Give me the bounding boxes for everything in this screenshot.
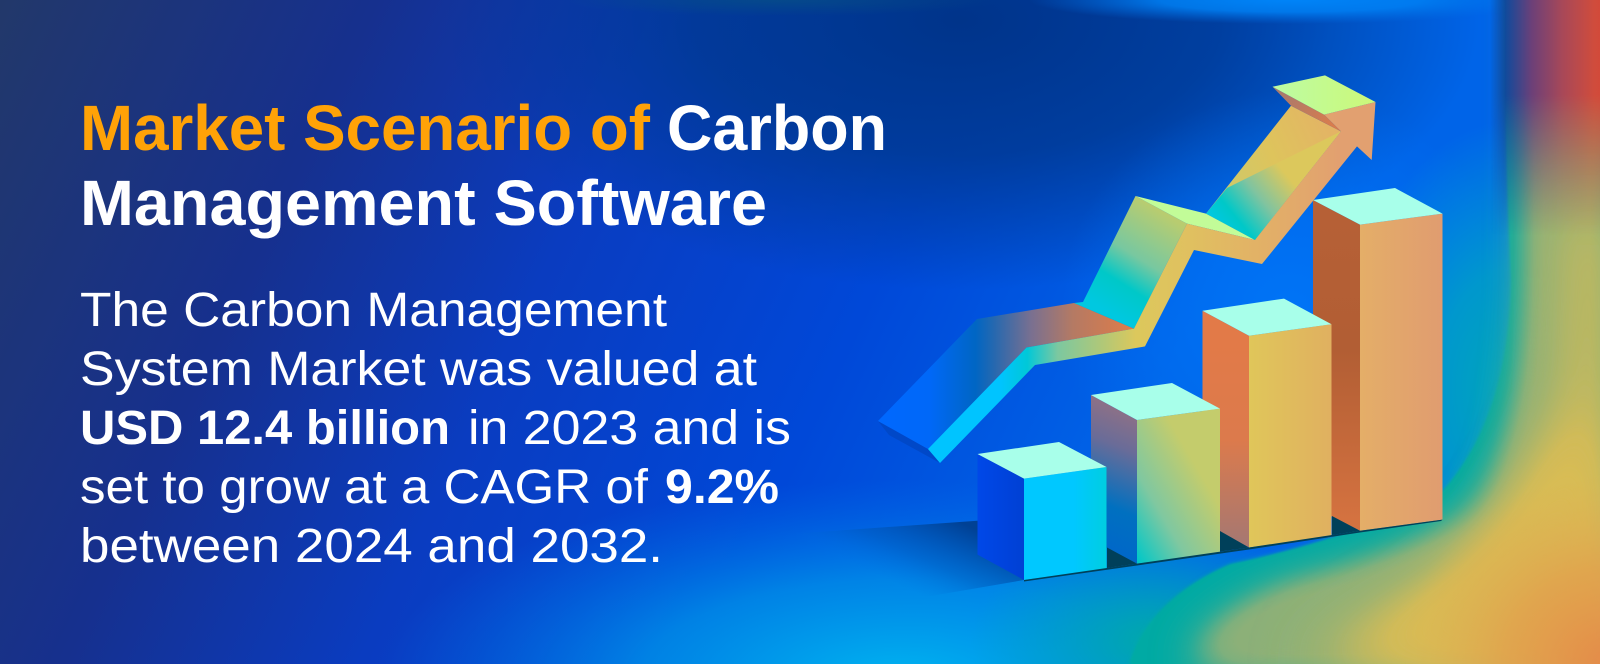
arrow head top face (1272, 75, 1376, 115)
floor shadow (790, 520, 1024, 597)
body text: The Carbon Management (80, 284, 667, 337)
title: Management Software (80, 167, 767, 239)
bar 4 (1313, 188, 1442, 535)
illustration: rising 3D bar chart with arrow (790, 75, 1442, 597)
bar 3 (1202, 299, 1332, 552)
body text: System Market was valued at (80, 343, 757, 396)
title: Carbon (667, 92, 887, 164)
body text: in 2023 and is (468, 402, 791, 455)
arrow back face (878, 303, 1134, 449)
arrow head underside (1272, 87, 1341, 131)
body text: USD 12.4 billion (80, 402, 450, 455)
body text: between 2024 and 2032. (80, 520, 663, 573)
arrow upper left face (1074, 196, 1187, 329)
arrow crease top face (1136, 196, 1255, 240)
ground line under bars (1024, 520, 1442, 582)
arrow upper right lower shade (1206, 131, 1341, 240)
arrow upper right face (1206, 106, 1341, 240)
arrow front strip (928, 102, 1376, 463)
title: Market Scenario of (80, 92, 651, 164)
arrow tail underside (878, 421, 940, 463)
title (80, 92, 887, 239)
bar 2 (1091, 383, 1220, 568)
body text: set to grow at a CAGR of (80, 461, 649, 514)
bar 1 (978, 442, 1106, 580)
body text (80, 284, 791, 573)
body text: 9.2% (665, 461, 779, 514)
growth arrow (878, 75, 1376, 463)
